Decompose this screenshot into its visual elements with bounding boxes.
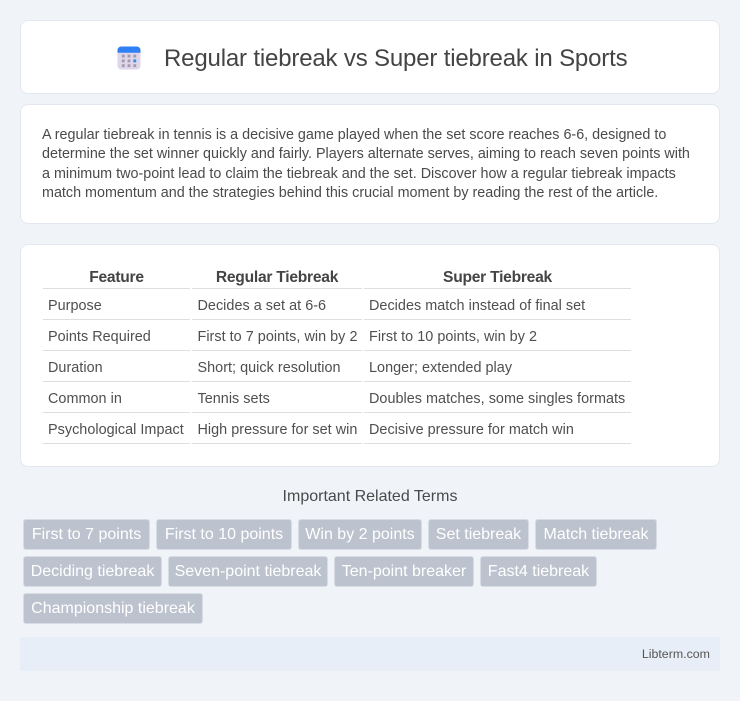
text block: description: a minimum two-point lead to claim the tiebreak and the set. Discover how a regular tiebreak impacts xyxy=(42,166,676,182)
table row: purpose xyxy=(48,298,586,314)
table row: points required: First to 10 points, win by 2 xyxy=(369,329,537,345)
panel: description xyxy=(20,104,720,224)
table row: purpose: Purpose xyxy=(48,298,102,314)
heading: related terms: Important Related Terms xyxy=(283,488,457,505)
footer: source text: Libterm.com xyxy=(642,647,710,661)
tag xyxy=(298,519,422,550)
table row: points required: Points Required xyxy=(48,329,151,345)
table row: psychological impact: Decisive pressure for match win xyxy=(369,422,574,438)
tag: Set tiebreak xyxy=(436,526,521,543)
tag: First to 7 points xyxy=(32,526,141,543)
table row: common in: Common in xyxy=(48,391,122,407)
text block: description: match momentum and the strategies behind this crucial moment by reading the rest of the article. xyxy=(42,185,658,201)
table row: duration: Longer; extended play xyxy=(369,360,512,376)
tag xyxy=(480,556,597,587)
panel: header xyxy=(20,20,720,94)
table row: psychological impact xyxy=(48,422,574,438)
tag xyxy=(535,519,657,550)
text block: description: determine the set winner quickly and fairly. Players alternate serves, aiming to reach seven points with xyxy=(42,146,690,162)
table header: Regular Tiebreak xyxy=(216,269,338,286)
table row: common in xyxy=(48,391,625,407)
table row: purpose: Decides match instead of final set xyxy=(369,298,585,314)
tag xyxy=(23,556,162,587)
tag xyxy=(156,519,292,550)
table: comparison xyxy=(43,269,631,444)
footer xyxy=(20,637,720,671)
tag: First to 10 points xyxy=(165,526,283,543)
table row: common in: Doubles matches, some singles formats xyxy=(369,391,625,407)
tag xyxy=(23,593,203,624)
text block: description xyxy=(42,127,690,201)
table row: duration: Short; quick resolution xyxy=(198,360,341,376)
tag: Fast4 tiebreak xyxy=(488,563,589,580)
table header: Feature xyxy=(89,269,144,286)
table row: duration xyxy=(48,360,512,376)
table row: common in: Tennis sets xyxy=(198,391,270,407)
tag xyxy=(23,519,150,550)
tag xyxy=(334,556,474,587)
table header: Super Tiebreak xyxy=(443,269,552,286)
tag: Championship tiebreak xyxy=(31,600,195,617)
table row: points required xyxy=(48,329,537,345)
text block: description: A regular tiebreak in tennis is a decisive game played when the set score reaches 6-6, designed to xyxy=(42,127,666,143)
title: Regular tiebreak vs Super tiebreak in Sports xyxy=(164,45,627,72)
panel: comparison table xyxy=(20,244,720,467)
tag: Match tiebreak xyxy=(544,526,648,543)
tag: Win by 2 points xyxy=(305,526,415,543)
tag: Deciding tiebreak xyxy=(31,563,154,580)
table row: purpose: Decides a set at 6-6 xyxy=(198,298,326,314)
tag: Seven-point tiebreak xyxy=(175,563,321,580)
table header xyxy=(89,269,552,286)
icon: calendar xyxy=(117,46,141,70)
table row: psychological impact: Psychological Impact xyxy=(48,422,184,438)
table row: points required: First to 7 points, win by 2 xyxy=(198,329,357,345)
tag xyxy=(168,556,328,587)
tag xyxy=(428,519,529,550)
panel: term tags xyxy=(23,519,657,624)
table row: psychological impact: High pressure for set win xyxy=(198,422,357,438)
table row: duration: Duration xyxy=(48,360,103,376)
tag: Ten-point breaker xyxy=(342,563,466,580)
